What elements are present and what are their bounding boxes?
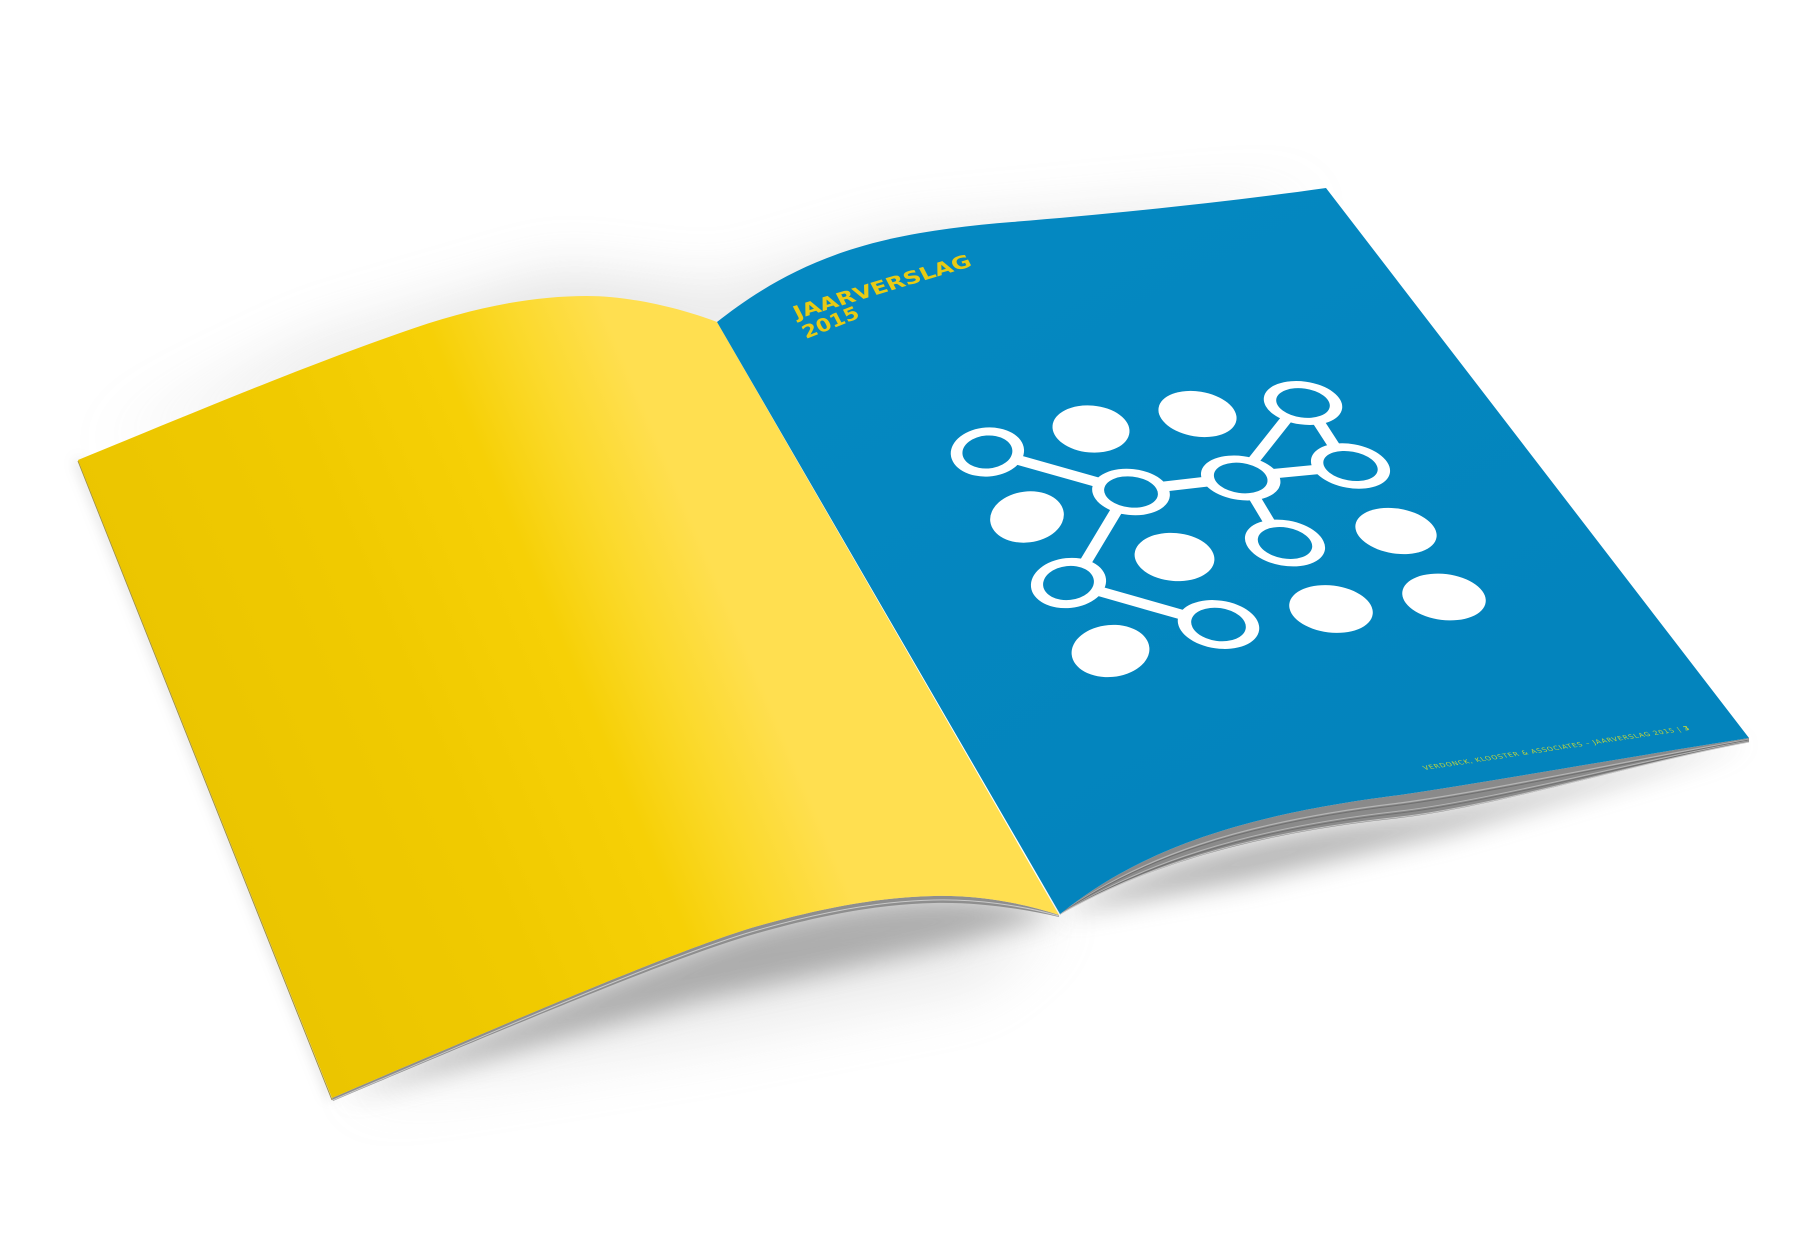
panel: blue right page — [717, 188, 1749, 914]
icon: network ring nodes — [949, 376, 1394, 654]
icon: network connector lines — [1015, 412, 1338, 617]
paper stack: left page edges — [78, 461, 1059, 1101]
shadow: outer left edge — [78, 460, 332, 1098]
shadow: soft tail under left page — [340, 915, 1059, 1098]
icon: network solid nodes — [987, 386, 1488, 680]
shadow: behind top edges — [100, 200, 1320, 450]
title: Jaarverslag 2015 — [787, 252, 975, 343]
title: Jaarverslag 2015: JAARVERSLAG — [787, 252, 975, 324]
panel: yellow left page — [78, 296, 1059, 1098]
shadow: under right page — [1060, 742, 1749, 914]
title: Jaarverslag 2015: 2015 — [799, 303, 863, 343]
paper stack: right page edges — [1060, 738, 1749, 914]
shadow: under left page — [340, 896, 1059, 1098]
footer text with page number: VERDONCK, KLOOSTER & ASSOCIATES – JAARVERSLAG 2015 | 3 — [1421, 725, 1691, 772]
